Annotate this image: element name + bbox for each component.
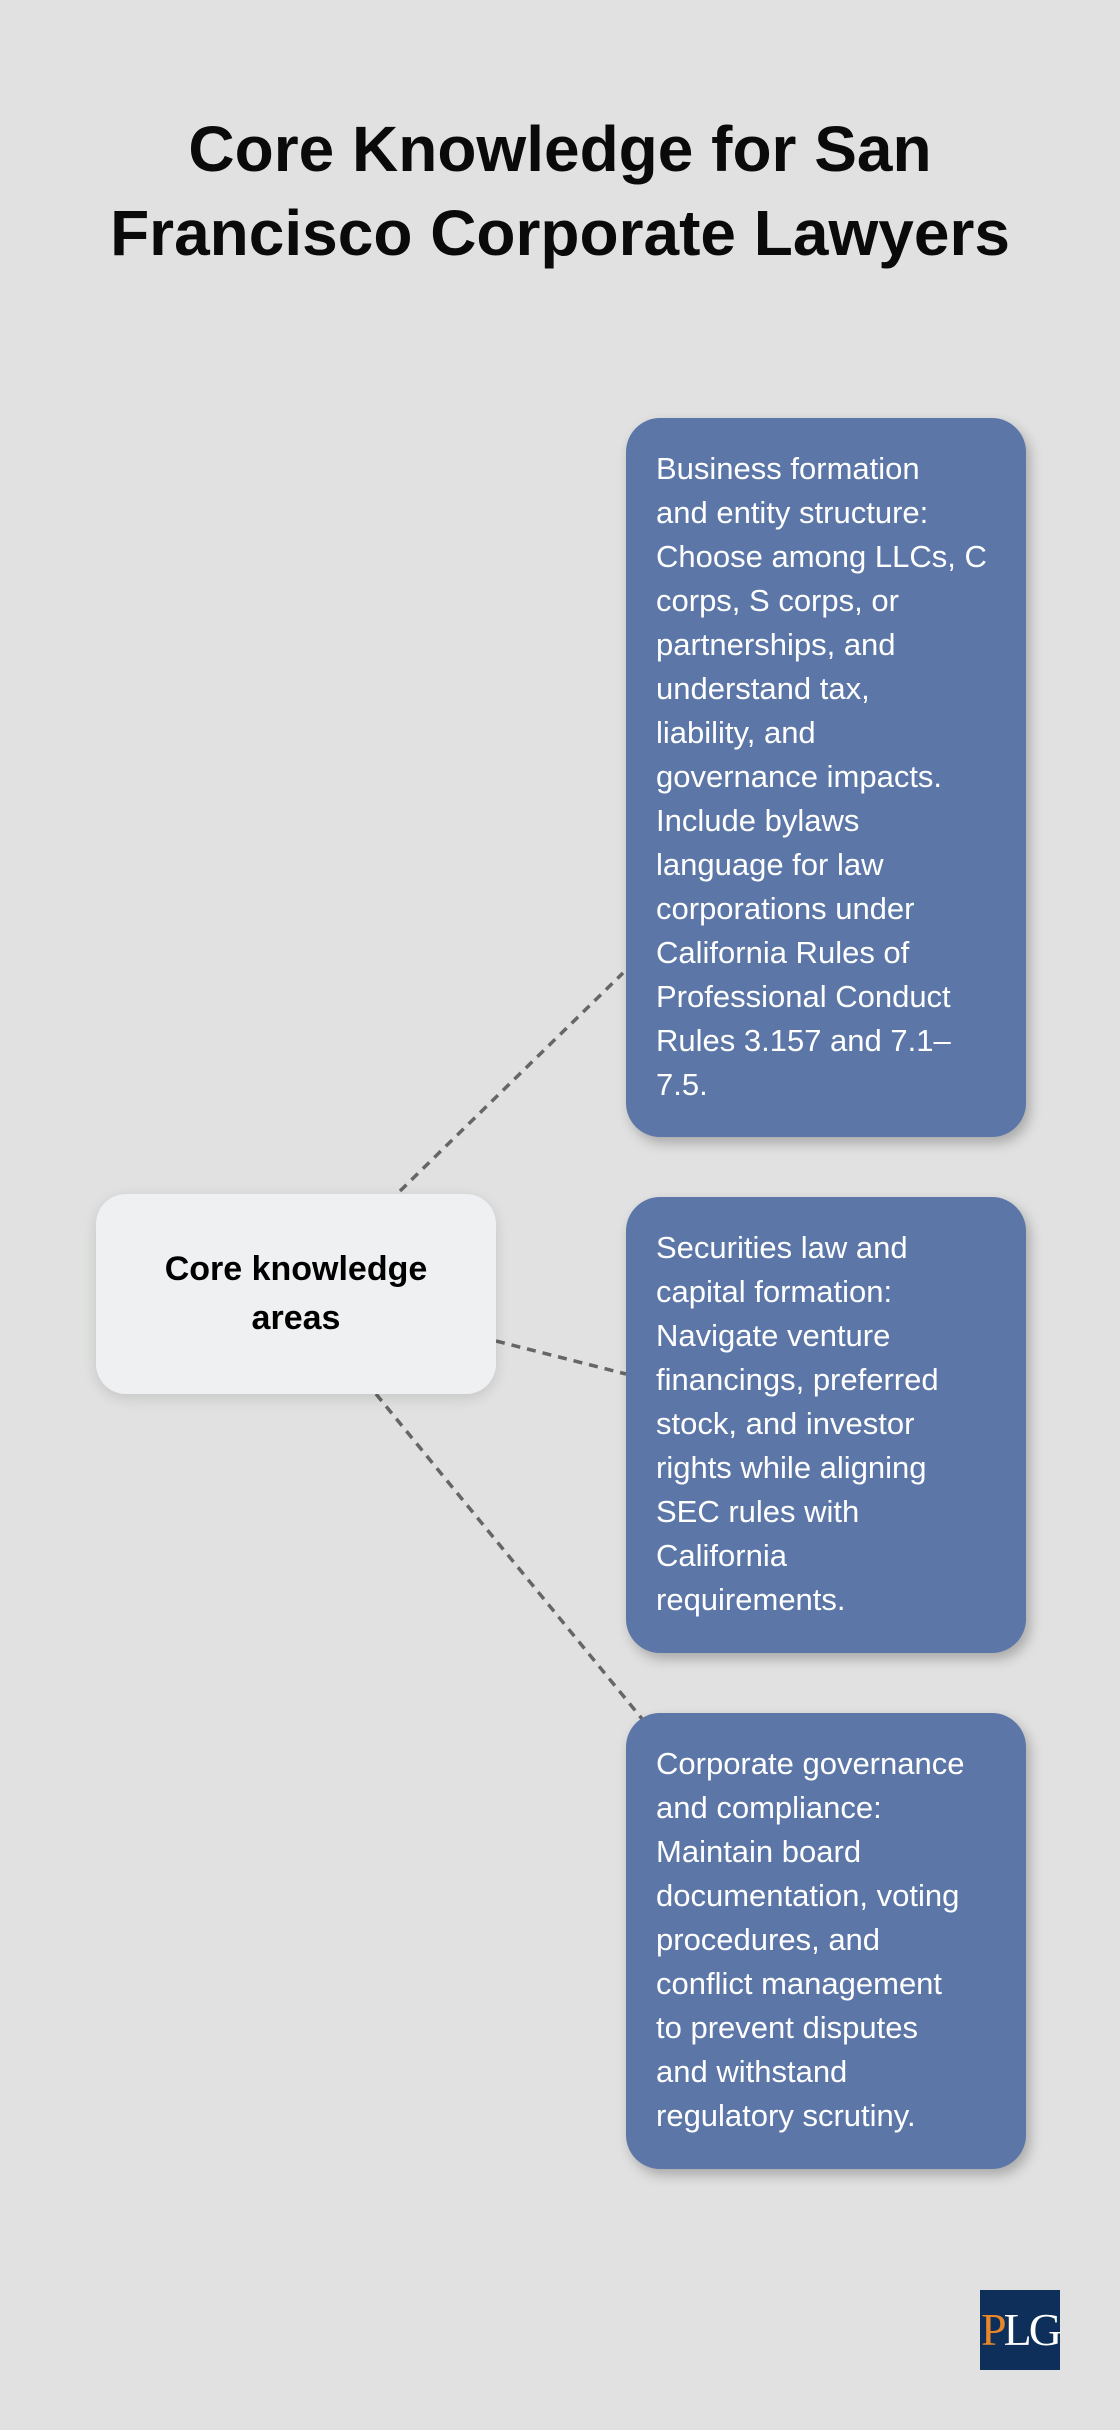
center node: Core knowledge xyxy=(165,1250,427,1288)
box: business formation: corporations under xyxy=(656,891,914,926)
box: governance: to prevent disputes xyxy=(656,2010,918,2045)
box: securities law: Securities law and xyxy=(656,1230,908,1265)
box: securities law: capital formation: xyxy=(656,1274,892,1309)
box: securities law xyxy=(626,1197,1026,1653)
box: governance xyxy=(626,1713,1026,2169)
box: governance: Corporate governance xyxy=(656,1746,964,1781)
box: business formation xyxy=(626,418,1026,1137)
box: business formation: corps, S corps, or xyxy=(656,583,899,618)
box: governance: and compliance: xyxy=(656,1790,882,1825)
box: business formation: and entity structure: xyxy=(656,495,928,530)
box: governance: documentation, voting xyxy=(656,1878,959,1913)
box: business formation: language for law xyxy=(656,847,884,882)
box: securities law: Navigate venture xyxy=(656,1318,890,1353)
box: governance: procedures, and xyxy=(656,1922,880,1957)
box: securities law: rights while aligning xyxy=(656,1450,927,1485)
logo xyxy=(980,2290,1060,2370)
box: governance: conflict management xyxy=(656,1966,942,2001)
box: governance: and withstand xyxy=(656,2054,847,2089)
box: governance: regulatory scrutiny. xyxy=(656,2098,916,2133)
box: governance: Maintain board xyxy=(656,1834,861,1869)
box: business formation: Include bylaws xyxy=(656,803,859,838)
box: business formation: California Rules of xyxy=(656,935,909,970)
box: business formation: 7.5. xyxy=(656,1067,708,1102)
title: Core Knowledge for San xyxy=(188,113,932,185)
title xyxy=(110,113,1010,269)
box: business formation: Business formation xyxy=(656,451,920,486)
box: business formation: Professional Conduct xyxy=(656,979,951,1014)
box: securities law: financings, preferred xyxy=(656,1362,939,1397)
box: business formation: governance impacts. xyxy=(656,759,942,794)
title: Francisco Corporate Lawyers xyxy=(110,197,1010,269)
box: securities law: SEC rules with xyxy=(656,1494,859,1529)
logo: PLG xyxy=(981,2304,1059,2355)
box: securities law: California xyxy=(656,1538,787,1573)
box: business formation: understand tax, xyxy=(656,671,870,706)
box: securities law: requirements. xyxy=(656,1582,846,1617)
box: business formation: liability, and xyxy=(656,715,816,750)
box: business formation: Choose among LLCs, C xyxy=(656,539,987,574)
box: business formation: partnerships, and xyxy=(656,627,896,662)
box: securities law: stock, and investor xyxy=(656,1406,914,1441)
box: business formation: Rules 3.157 and 7.1– xyxy=(656,1023,951,1058)
center node xyxy=(96,1194,496,1394)
center node: areas xyxy=(252,1299,340,1337)
